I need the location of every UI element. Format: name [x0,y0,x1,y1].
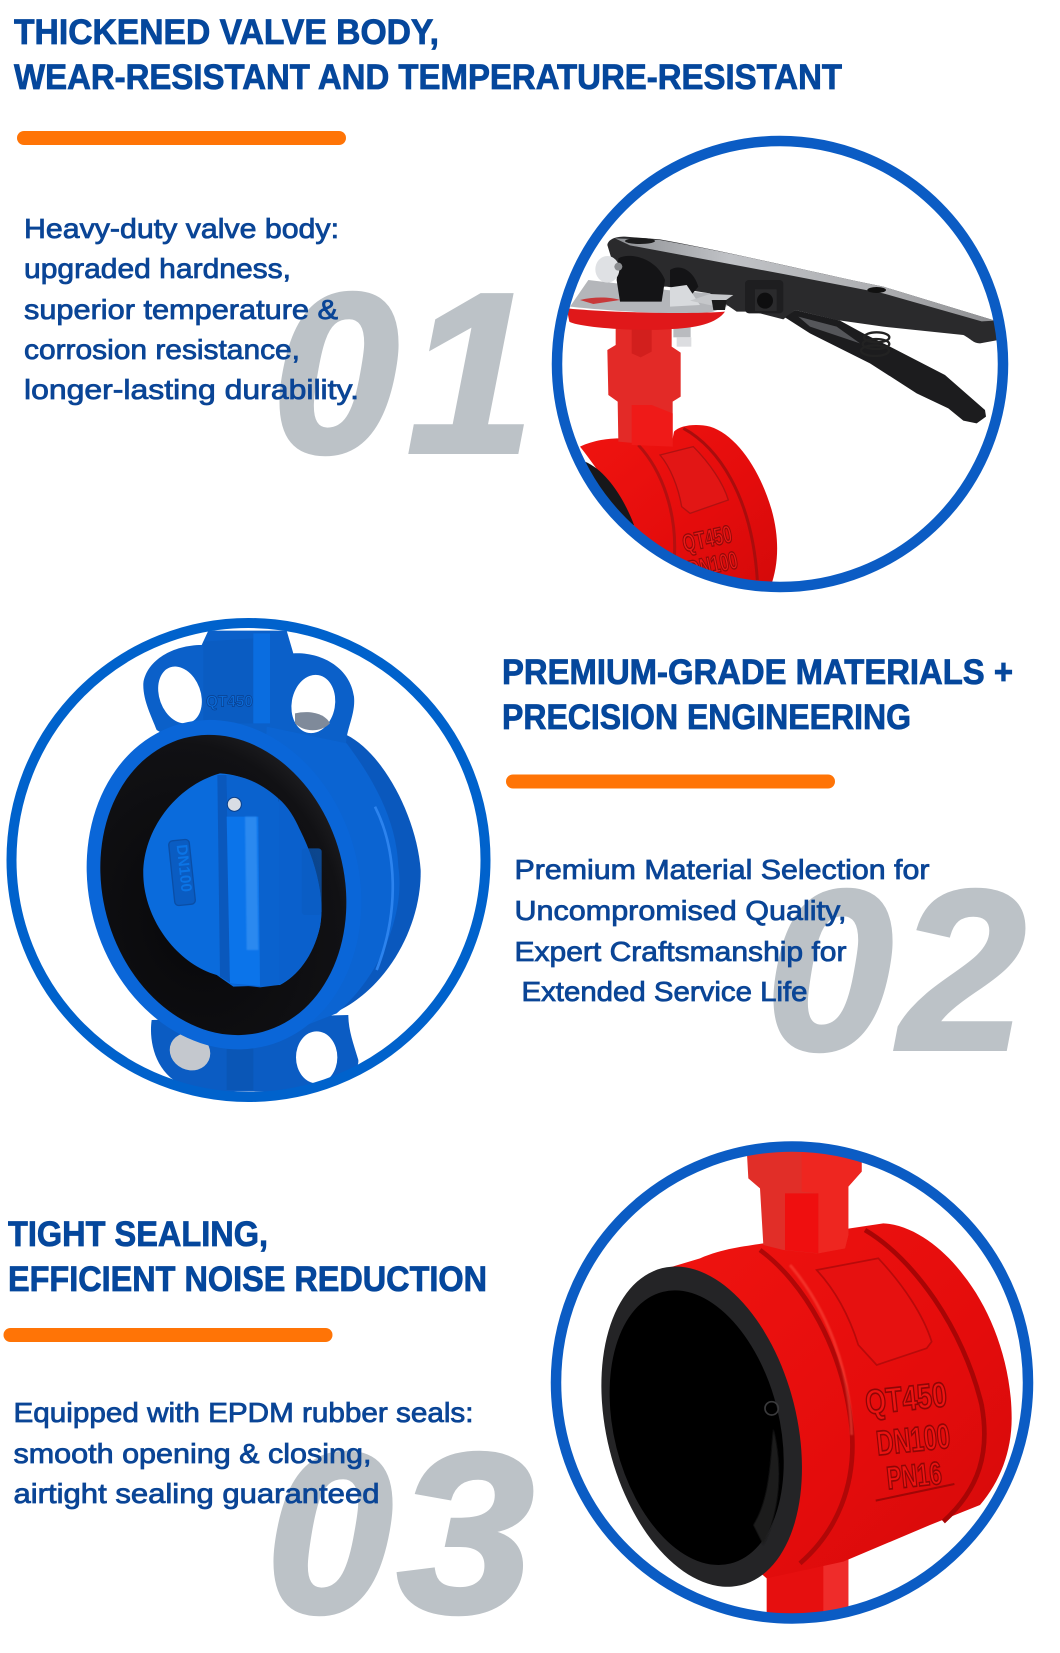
text block: heavy-duty body: longer-lasting durability. [24,374,359,405]
cylindrical body [650,1223,1012,1578]
panel: thickened valve body [14,13,1003,588]
rubber seat [100,734,346,1036]
lower lever and spring [785,310,986,423]
text block: EPDM seals: airtight sealing guaranteed [14,1478,380,1509]
silver nut [673,327,691,347]
text block: heavy-duty body: corrosion resistance, [24,334,300,365]
illustration: red grooved valve [570,1148,1012,1617]
valve body red: QT450 [680,521,735,558]
lever handle [607,237,998,343]
silver bolt and bracket [595,256,733,310]
text block: premium material selection: Uncompromised Quality, [514,895,846,926]
number 01: 01 [272,247,534,501]
embossed markings: DN100 [874,1418,952,1463]
dark bore [610,1290,784,1565]
text block: heavy-duty body: upgraded hardness, [24,253,291,284]
text block: premium material selection: Extended Service Life [522,976,808,1007]
valve neck [607,327,681,447]
number 03 [266,1407,534,1653]
embossed markings: QT450 [864,1376,949,1422]
heading: thickened valve body [14,13,842,97]
orange divider bar [506,774,835,788]
heading: premium-grade materials: PRECISION ENGINEERING [502,698,911,737]
text block: heavy-duty body [24,213,359,405]
top lugs and neck: QT450 [206,694,253,711]
heading: thickened valve body: THICKENED VALVE BODY, [14,13,439,52]
text block: EPDM seals: smooth opening & closing, [14,1438,372,1469]
bottom lugs and neck [151,1015,358,1092]
top lugs and neck [143,630,354,743]
illustration: red valve with lever handle [567,237,998,588]
orange divider bar [17,131,346,145]
valve body red [580,425,777,588]
illustration: blue wafer butterfly valve [50,631,421,1092]
valve disc [143,773,322,987]
valve body red: DN100 [686,547,740,584]
text block: premium material selection: Expert Craftsmanship for [514,936,846,967]
text block: heavy-duty body: Heavy-duty valve body: [24,213,339,244]
rear body [340,735,421,1010]
heading: premium-grade materials: PREMIUM-GRADE MATERIALS + [502,653,1013,692]
heading: tight sealing [8,1215,487,1299]
text block: EPDM seals: Equipped with EPDM rubber seals: [14,1397,474,1428]
panel: premium-grade materials [12,623,1026,1098]
lower valve stem [766,1560,848,1614]
embossed markings [864,1376,957,1501]
heading: tight sealing: TIGHT SEALING, [8,1215,268,1254]
heading: tight sealing: EFFICIENT NOISE REDUCTION [8,1260,487,1299]
blue ring 3 [556,1146,1028,1618]
text block: premium material selection [514,854,930,1007]
rubber seal [601,1266,802,1587]
text block: EPDM seals [14,1397,474,1509]
valve stem [747,1148,862,1253]
panel: tight sealing [4,1146,1028,1653]
heading: thickened valve body: WEAR-RESISTANT AND TEMPERATURE-RESISTANT [14,58,842,97]
text block: heavy-duty body: superior temperature & [24,294,338,325]
mounting flange [567,280,733,330]
heading: premium-grade materials [502,653,1013,737]
valve disc: DN100 [173,844,195,893]
number 02: 02 [766,844,1026,1098]
orange divider bar [4,1328,332,1342]
front flange and groove band [86,720,400,1050]
text block: premium material selection: Premium Material Selection for [514,854,930,885]
embossed markings: PN16 [885,1455,943,1496]
blue ring 1 [557,141,1003,587]
blue ring 2 [12,623,486,1097]
